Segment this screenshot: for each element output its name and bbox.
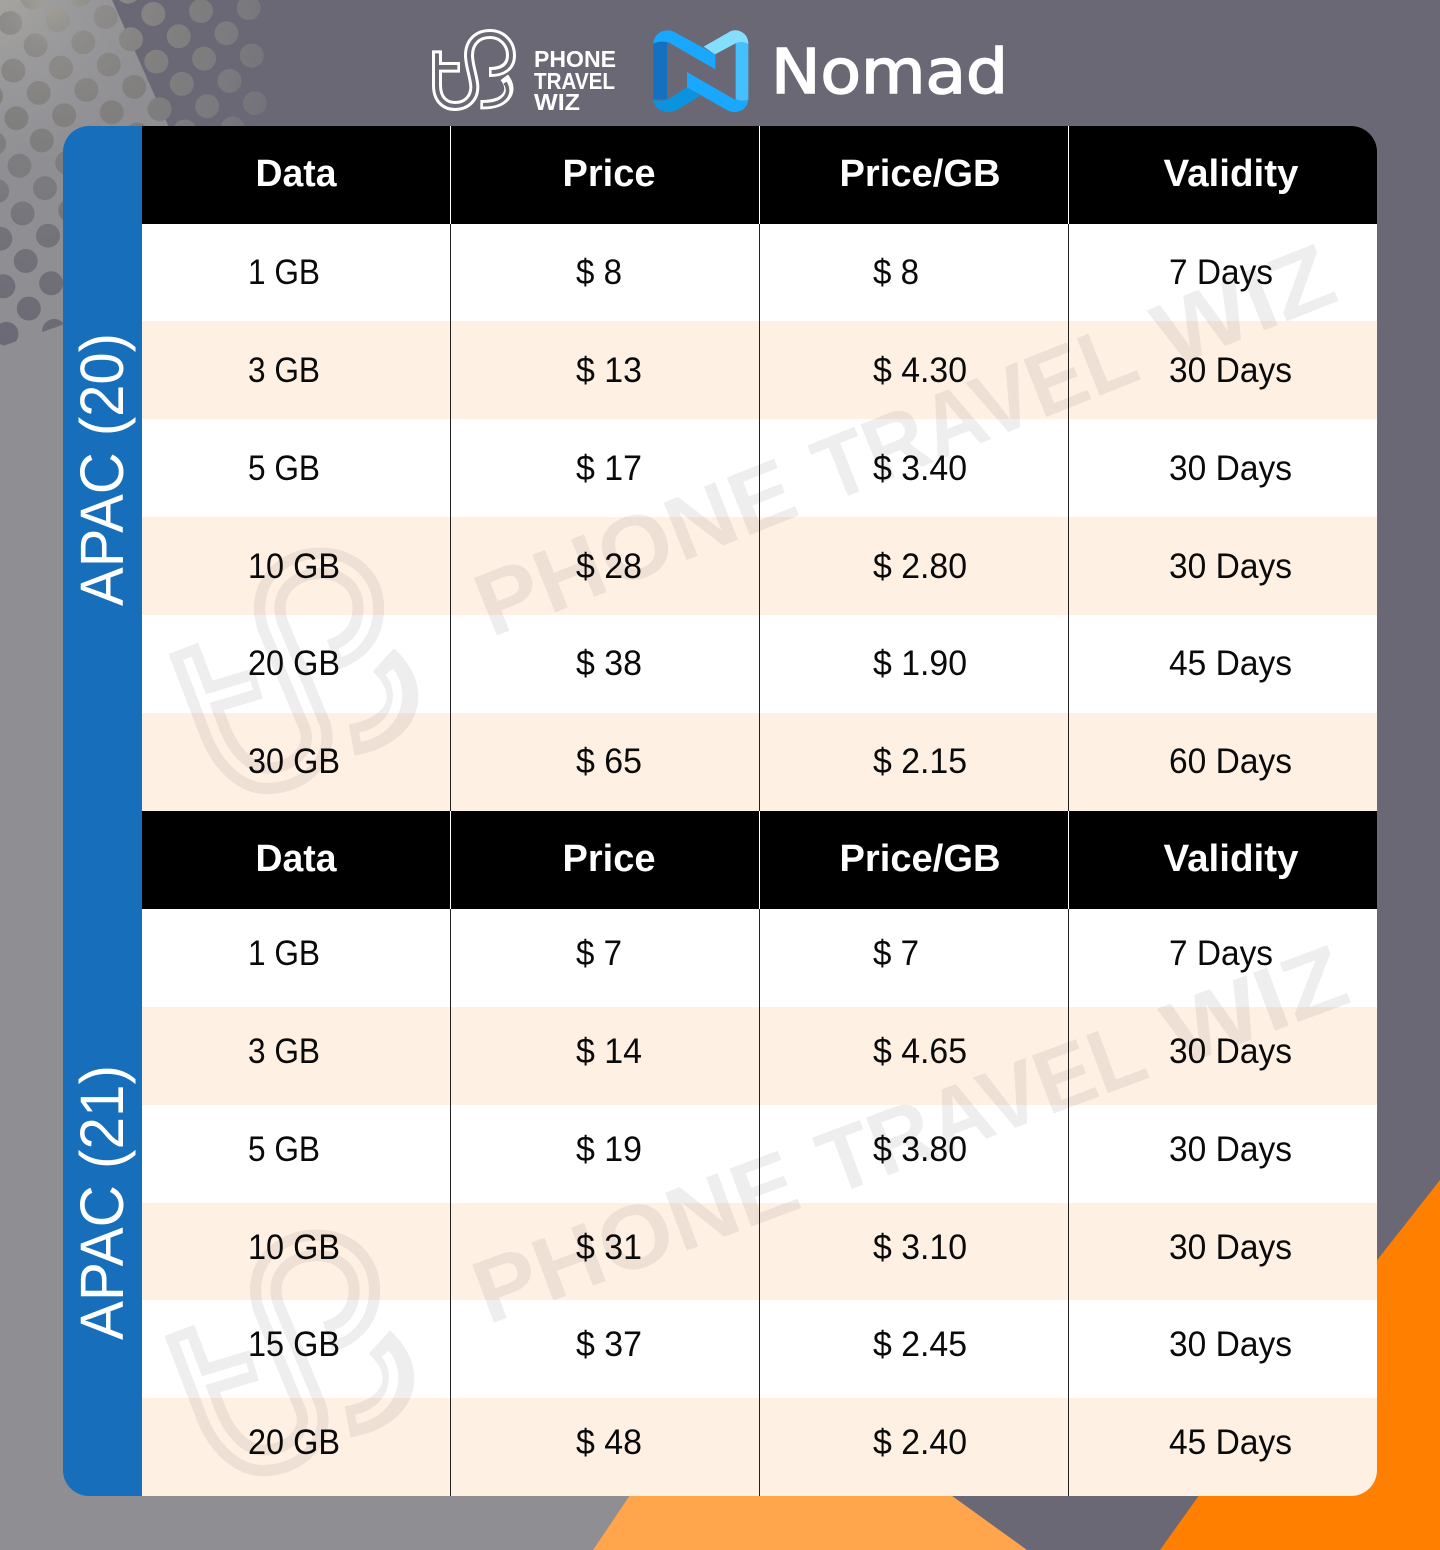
wordmark: Phone Travel Wiz	[534, 46, 616, 115]
table rows: APAC (20): 7 Days	[1169, 253, 1273, 292]
background: light orange shape	[593, 1480, 1027, 1550]
logo: Nomad	[653, 30, 1008, 112]
table rows: APAC (20): $ 28	[576, 547, 642, 586]
table rows: APAC (20): $ 17	[576, 449, 642, 488]
watermark text top: PHONE	[461, 440, 810, 657]
wordmark: Nomad: Nomad	[771, 36, 1008, 108]
sidebar	[63, 126, 142, 1496]
table rows: APAC (21): $ 7	[576, 934, 622, 973]
table rows: APAC (21): $ 48	[576, 1423, 642, 1462]
halftone dots	[0, 0, 267, 346]
table rows: APAC (21): $ 2.40	[873, 1423, 967, 1462]
table rows: APAC (20): $ 3.40	[873, 449, 967, 488]
table rows: APAC (20): $ 38	[576, 644, 642, 683]
table rows: APAC (21): $ 2.45	[873, 1325, 967, 1364]
table rows: APAC (20): 30 Days	[1169, 449, 1292, 488]
table rows: APAC (21): $ 31	[576, 1228, 642, 1267]
table rows: APAC (21): 20 GB	[248, 1423, 340, 1462]
column dividers	[450, 126, 1068, 1496]
header labels bottom: Data	[256, 838, 337, 880]
table rows: APAC (21): $ 3.80	[873, 1130, 967, 1169]
sidebar label: APAC (21): APAC (21)	[68, 1065, 136, 1340]
logo: Phone Travel Wiz	[432, 29, 616, 111]
table rows: APAC (20): $ 1.90	[873, 644, 967, 683]
table rows: APAC (21)	[248, 934, 1292, 1462]
table rows: APAC (20): $ 2.80	[873, 547, 967, 586]
header labels bottom: Price/GB	[840, 838, 1000, 880]
table rows: APAC (21): 10 GB	[248, 1228, 340, 1267]
icon: tp monogram	[432, 29, 516, 111]
table rows: APAC (20): 60 Days	[1169, 742, 1292, 781]
watermark text bottom: WIZ	[1150, 926, 1360, 1086]
header labels top: Validity	[1164, 153, 1298, 195]
table rows: APAC (21): $ 14	[576, 1032, 642, 1071]
table rows: APAC (20)	[248, 253, 1292, 781]
watermark text bottom	[472, 946, 1350, 1322]
sidebar label: APAC (20): APAC (20)	[68, 333, 136, 606]
table rows: APAC (20): $ 2.15	[873, 742, 967, 781]
header labels top: Data	[256, 153, 337, 195]
header labels bottom: Price	[562, 838, 656, 880]
table rows: APAC (21): 30 Days	[1169, 1032, 1292, 1071]
table rows: APAC (20): $ 4.30	[873, 351, 967, 390]
table rows: APAC (21): $ 19	[576, 1130, 642, 1169]
table rows: APAC (20): $ 65	[576, 742, 642, 781]
table rows: APAC (20): 3 GB	[248, 351, 320, 390]
row stripes	[142, 224, 1377, 1496]
watermark text top: WIZ	[1140, 225, 1349, 387]
wordmark: Phone Travel Wiz: TRAVEL	[534, 68, 615, 94]
watermark text bottom: PHONE	[460, 1132, 812, 1344]
table rows: APAC (21): $ 37	[576, 1325, 642, 1364]
watermark logo top	[168, 548, 418, 794]
table rows: APAC (20): 45 Days	[1169, 644, 1292, 683]
watermark text bottom: TRAVEL	[805, 1002, 1159, 1215]
watermark text top	[474, 244, 1338, 636]
table rows: APAC (20): 5 GB	[248, 449, 320, 488]
table rows: APAC (20): 20 GB	[248, 644, 340, 683]
table rows: APAC (21): $ 7	[873, 934, 919, 973]
table rows: APAC (21): 1 GB	[248, 934, 320, 973]
header row bottom	[142, 811, 1377, 909]
table rows: APAC (20): 30 GB	[248, 742, 340, 781]
table rows: APAC (21): $ 3.10	[873, 1228, 967, 1267]
table rows: APAC (21): 30 Days	[1169, 1228, 1292, 1267]
table rows: APAC (20): 10 GB	[248, 547, 340, 586]
watermark text top: TRAVEL	[800, 304, 1151, 522]
background: top-left highlight	[0, 0, 170, 170]
table rows: APAC (21): 5 GB	[248, 1130, 320, 1169]
wordmark: Phone Travel Wiz: WIZ	[534, 89, 580, 115]
icon: Nomad N	[653, 30, 748, 112]
table rows: APAC (21): 30 Days	[1169, 1130, 1292, 1169]
table rows: APAC (20): $ 8	[576, 253, 622, 292]
table rows: APAC (21): $ 4.65	[873, 1032, 967, 1071]
header labels top	[256, 153, 1298, 195]
table rows: APAC (21): 45 Days	[1169, 1423, 1292, 1462]
table rows: APAC (21): 7 Days	[1169, 934, 1273, 973]
table rows: APAC (21): 30 Days	[1169, 1325, 1292, 1364]
header row top	[142, 126, 1377, 224]
table rows: APAC (21): 3 GB	[248, 1032, 320, 1071]
table rows: APAC (20): 30 Days	[1169, 351, 1292, 390]
watermark logo bottom	[164, 1230, 414, 1476]
table rows: APAC (20): 30 Days	[1169, 547, 1292, 586]
wordmark: Phone Travel Wiz: PHONE	[534, 46, 616, 72]
header labels bottom	[256, 838, 1298, 880]
table rows: APAC (20): 1 GB	[248, 253, 320, 292]
header labels bottom: Validity	[1164, 838, 1298, 880]
table rows: APAC (20): $ 8	[873, 253, 919, 292]
table rows: APAC (21): 15 GB	[248, 1325, 340, 1364]
header labels top: Price/GB	[840, 153, 1000, 195]
background: orange shape	[1160, 1180, 1440, 1550]
table rows: APAC (20): $ 13	[576, 351, 642, 390]
background: grey left shape	[0, 0, 640, 1550]
header labels top: Price	[562, 153, 656, 195]
